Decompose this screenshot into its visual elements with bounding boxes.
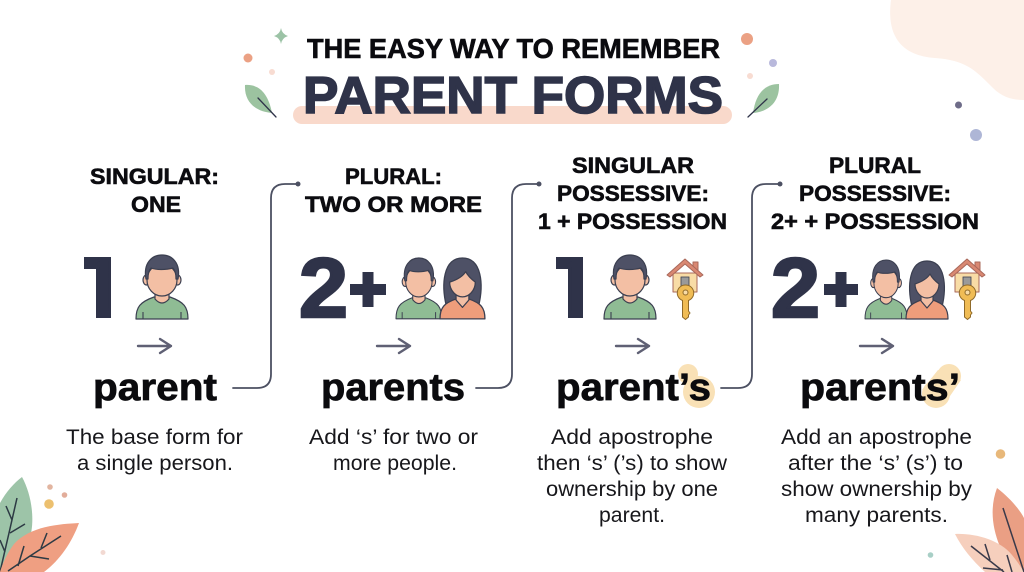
heading: SINGULAR: (90, 164, 219, 189)
description (66, 426, 243, 475)
arrow (616, 339, 649, 353)
title highlight bar (293, 106, 732, 124)
description: Add ‘s’ for two or (309, 426, 478, 449)
heading: 1 + POSSESSION (538, 209, 727, 234)
number 1 (84, 257, 111, 318)
description: after the ‘s’ (s’) to (788, 452, 963, 475)
description (309, 426, 478, 475)
title line 2: PARENT FORMS (303, 67, 723, 125)
column 3: singular possessive (537, 153, 728, 527)
heading: PLURAL: (345, 164, 442, 189)
description (781, 426, 973, 527)
arrow (860, 339, 893, 353)
heading: POSSESSIVE: (557, 181, 709, 206)
icon: man (136, 255, 188, 319)
icon: man (604, 255, 656, 319)
arrow (377, 339, 410, 353)
description: many parents. (805, 504, 948, 527)
description: a single person. (77, 452, 233, 475)
decoration: bottom-left leaves (0, 477, 106, 572)
number 1: 1 (551, 242, 598, 336)
heading: SINGULAR (572, 153, 694, 178)
title (293, 33, 732, 125)
decoration: bottom-right leaves (928, 449, 1024, 572)
description (537, 426, 728, 527)
description: Add apostrophe (551, 426, 713, 449)
heading: ONE (131, 192, 181, 217)
word: parents: parents (321, 367, 465, 409)
heading (771, 153, 979, 234)
heading: PLURAL (829, 153, 921, 178)
connector 2 (476, 182, 542, 388)
heading: TWO OR MORE (305, 192, 482, 217)
column 1: singular (66, 164, 243, 475)
description: Add an apostrophe (781, 426, 972, 449)
s-apostrophe highlight (922, 364, 961, 408)
number 1: 1 (79, 242, 126, 336)
heading (538, 153, 727, 234)
number 2+ (771, 241, 858, 335)
heading: 2+ + POSSESSION (771, 209, 979, 234)
description: parent. (599, 504, 665, 527)
description: ownership by one (546, 478, 718, 501)
icon: house and key (667, 259, 703, 320)
heading (305, 164, 482, 217)
icon: woman (440, 258, 485, 319)
icon: woman (906, 261, 948, 319)
number 2+ (299, 241, 386, 335)
description: more people. (333, 452, 457, 475)
column 4: plural possessive (771, 153, 985, 527)
apostrophe-s highlight (678, 364, 715, 408)
title decoration: right (741, 33, 779, 117)
connector 1 (233, 182, 300, 388)
description: then ‘s’ (’s) to show (537, 452, 728, 475)
title line 1: THE EASY WAY TO REMEMBER (307, 33, 720, 64)
icon: man (396, 258, 442, 319)
description: show ownership by (781, 478, 973, 501)
word: parent's: parent’s (556, 367, 711, 409)
icon: house and key (949, 259, 985, 320)
column 2: plural (299, 164, 485, 475)
number 2+: 2 (771, 241, 820, 335)
icon: man (865, 260, 907, 319)
decorative blob: top right (890, 0, 1024, 100)
word: parents': parents’ (800, 367, 960, 409)
word: parent: parent (93, 367, 217, 409)
number 2+: 2 (299, 241, 348, 335)
number 1 (556, 257, 583, 318)
heading: POSSESSIVE: (799, 181, 951, 206)
decorative dots: top right (955, 102, 982, 141)
heading (90, 164, 219, 217)
description: The base form for (66, 426, 243, 449)
arrow (138, 339, 171, 353)
title decoration: left (244, 28, 288, 117)
connector 3 (721, 182, 782, 388)
